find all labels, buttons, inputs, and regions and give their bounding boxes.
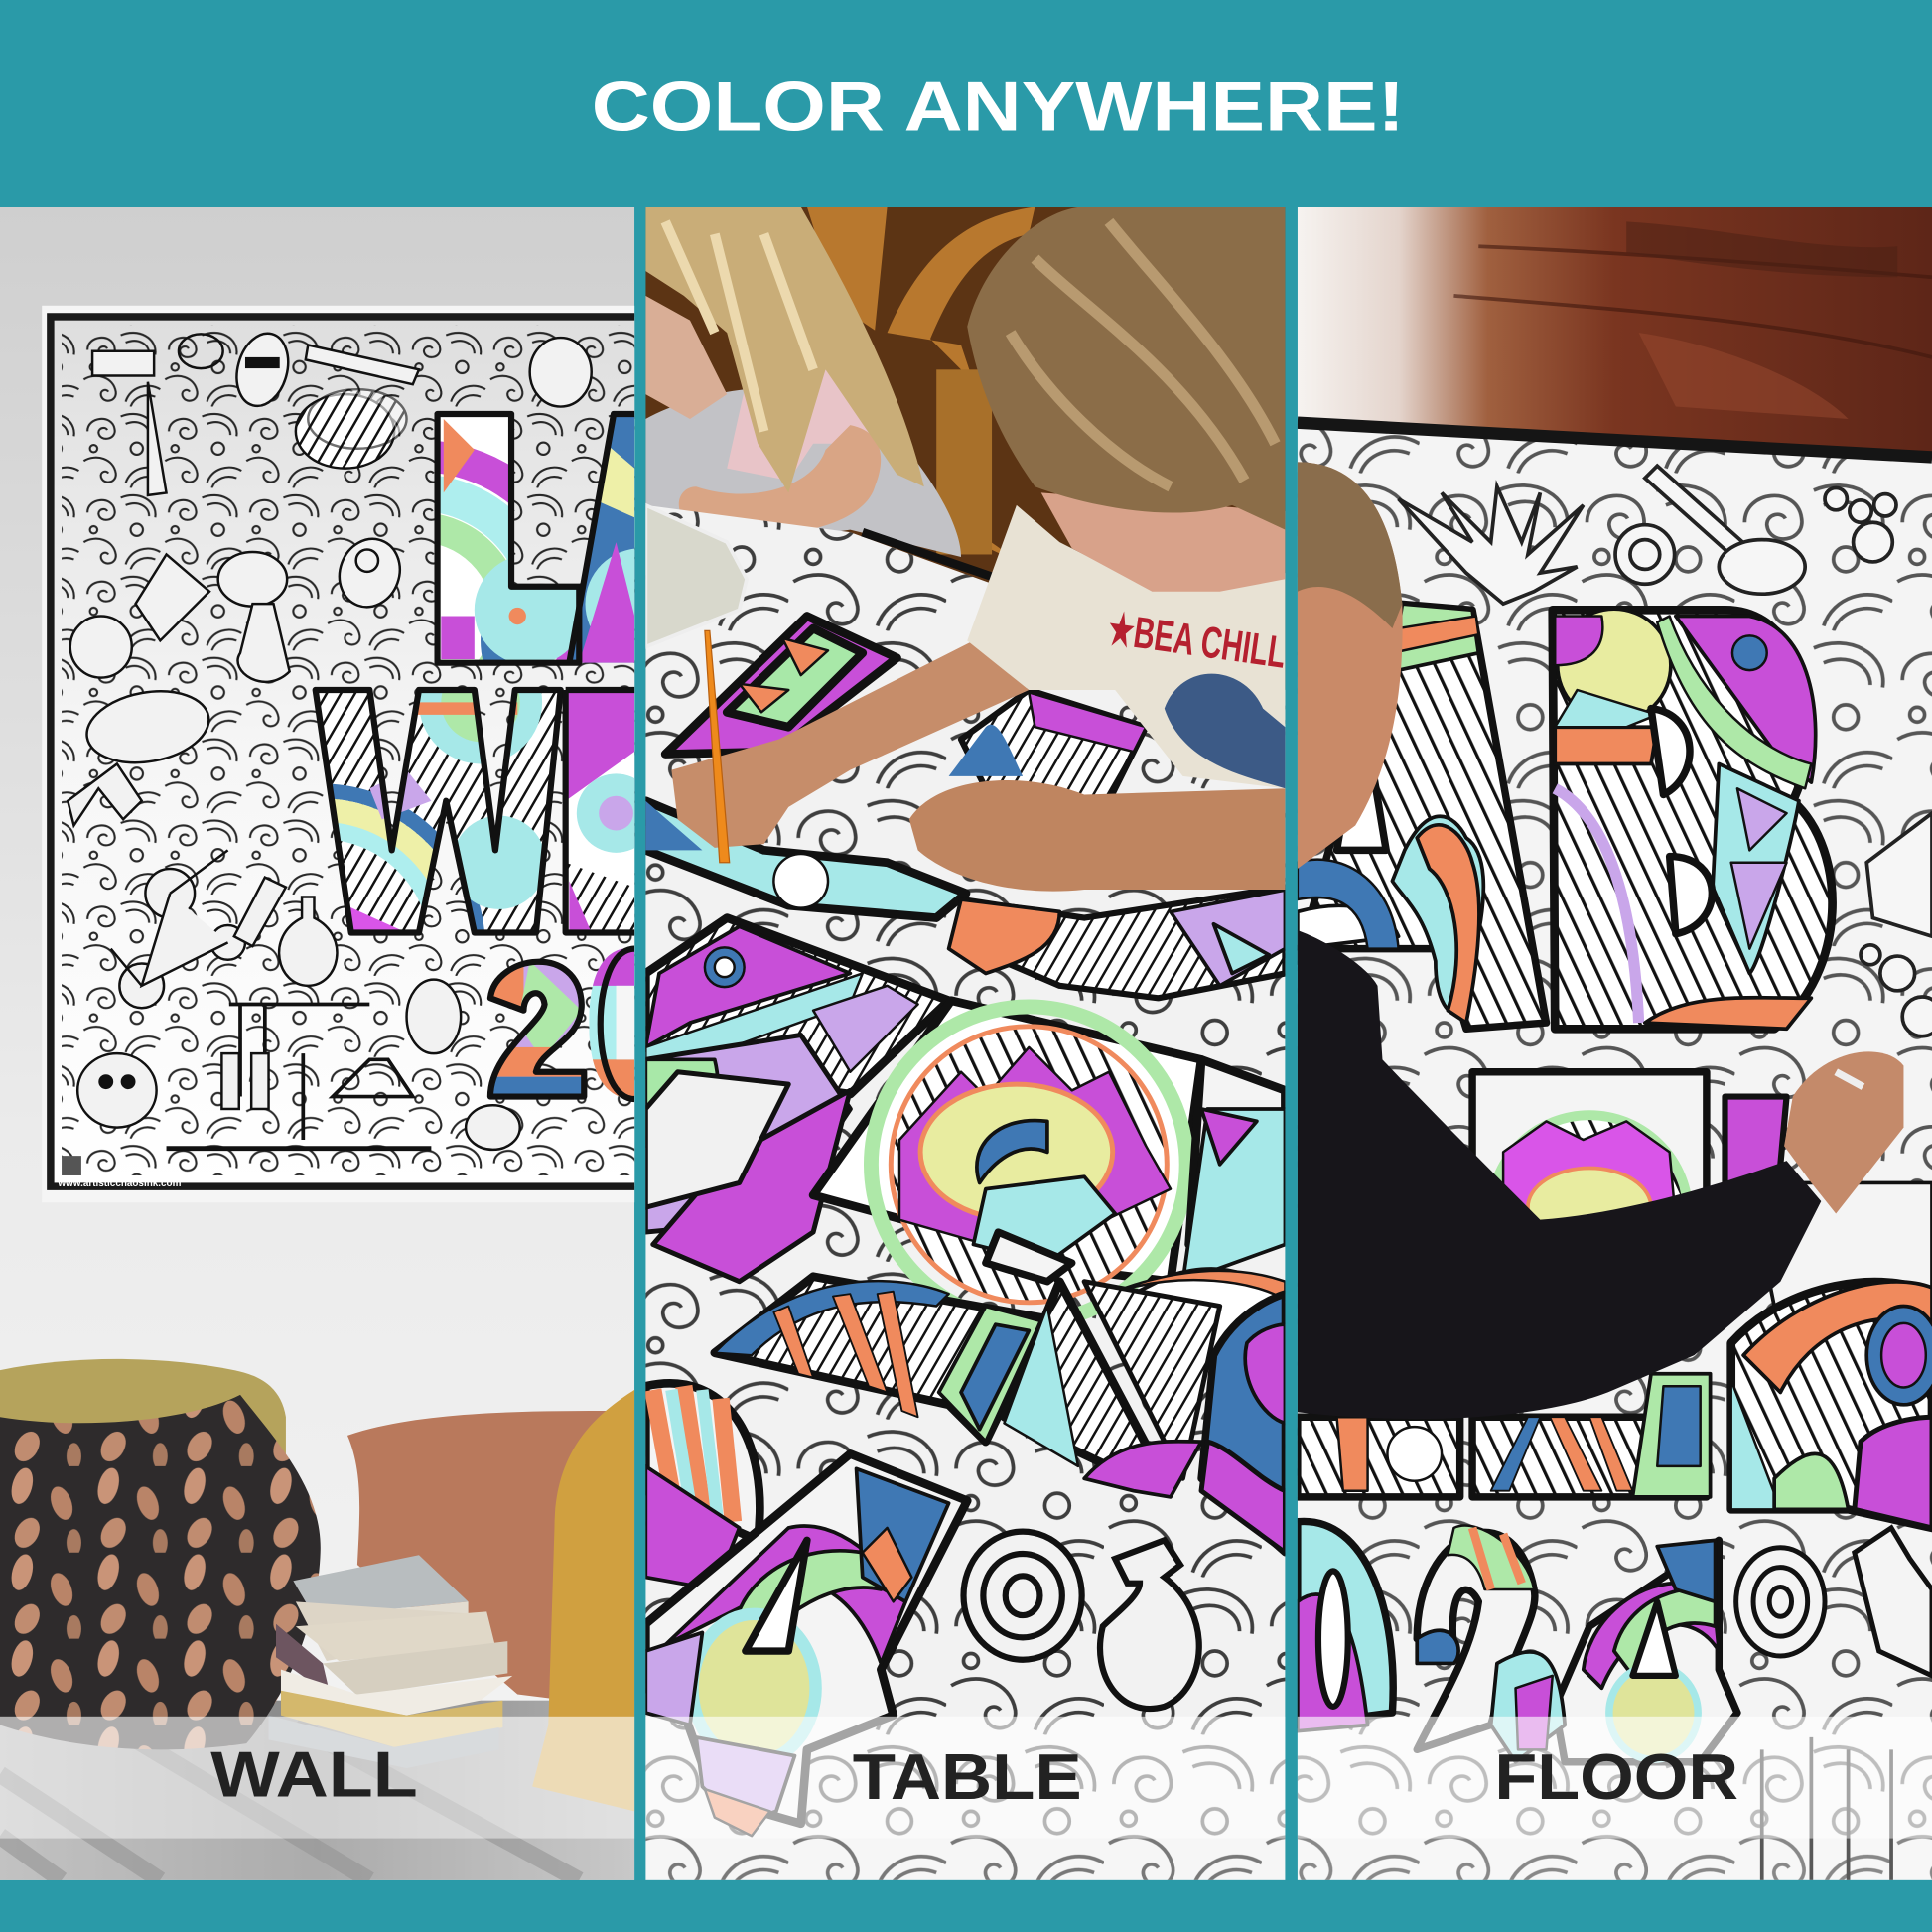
colored letter A (1298, 604, 1547, 1029)
big mandala letter (813, 1001, 1285, 1380)
yellow throw (0, 1358, 286, 1453)
poster top edge (863, 532, 992, 577)
lower row letters (645, 1277, 1285, 1589)
poster url: www.artisticchaosink.com (57, 1178, 182, 1189)
upper colored letter (645, 617, 1285, 998)
poster top border (1298, 423, 1932, 457)
person head (1298, 462, 1403, 869)
second row colored letters (1298, 1072, 1932, 1528)
colored letter E (568, 693, 635, 929)
wood dining background (645, 207, 1285, 725)
boy face and hair (967, 207, 1285, 592)
tilted poster sheet (645, 505, 1285, 1880)
colored letter L (441, 417, 576, 660)
bottom colored letter (645, 1453, 967, 1836)
colored number 2 (493, 965, 582, 1094)
girl at table (645, 207, 961, 557)
orange pencil (705, 630, 730, 863)
pillow (347, 1411, 617, 1707)
shirt whale graphic (1165, 674, 1285, 788)
stack of books (269, 1555, 512, 1768)
panel: table (645, 207, 1289, 1880)
colored letter A (573, 417, 634, 663)
boy arm holding pencil (671, 640, 1029, 848)
poster on wall (42, 306, 696, 1202)
qr code (62, 1156, 81, 1175)
shirt lettering: ★BEA CHILL (1105, 605, 1289, 678)
panel: floor (1298, 207, 1932, 1880)
caption: wall: WALL (210, 1738, 418, 1810)
poster doodles (645, 505, 1285, 1880)
caption: floor: FLOOR (1494, 1741, 1738, 1813)
letter outlines (316, 414, 640, 1099)
second row colored letter (645, 918, 949, 1282)
crayon tub (645, 505, 747, 647)
person black sleeve (1298, 930, 1821, 1419)
mustard chair (532, 1390, 634, 1811)
boy shirt (967, 505, 1285, 788)
caption band: wall (0, 1717, 634, 1880)
poster on floor (1298, 425, 1932, 1880)
caption band: table (645, 1717, 1285, 1880)
gloves, petri dish, molecule doodles (1399, 466, 1932, 1036)
colored letter W (320, 693, 557, 929)
floor (0, 1701, 634, 1880)
title: COLOR ANYWHERE! (592, 68, 1405, 146)
poster doodles (68, 328, 592, 1150)
colored number 0 (589, 949, 634, 1097)
caption band: floor (1298, 1717, 1932, 1880)
wood floor (1298, 207, 1932, 472)
person hand with crayon (1784, 1051, 1903, 1213)
panel: wall (0, 207, 696, 1880)
doodle swirl and flask (1736, 1528, 1932, 1880)
caption: table: TABLE (853, 1741, 1082, 1813)
colored numerals 2024 (1298, 1521, 1737, 1762)
colored letter B (1553, 609, 1833, 1029)
poster doodles (1298, 425, 1932, 1880)
wall background (0, 207, 634, 1880)
leaf pattern basket (0, 1395, 321, 1749)
boy second arm (909, 780, 1285, 892)
concentric swirl and flask doodles (964, 1532, 1199, 1709)
